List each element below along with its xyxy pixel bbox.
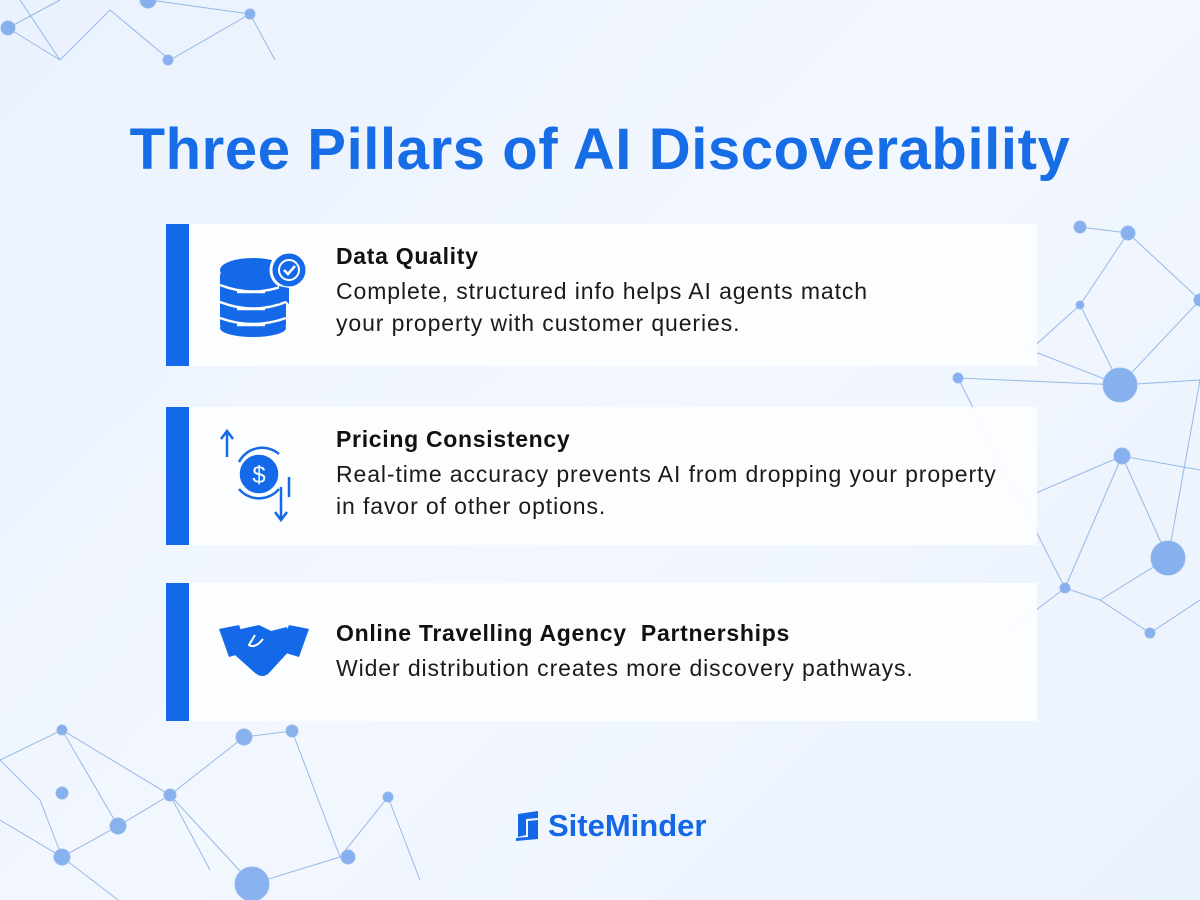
heading: OTA partnerships: Online Travelling Agency Partnerships — [336, 620, 790, 646]
text: data quality: your property with customer queries. — [336, 310, 740, 336]
text: data quality: Complete, structured info helps AI agents match — [336, 278, 868, 304]
text: pricing consistency — [336, 461, 997, 519]
logo: SiteMinder: SiteMinder — [548, 808, 706, 843]
icon: database with badge — [220, 254, 306, 337]
heading: data quality: Data Quality — [336, 243, 479, 269]
icon: price sync: $ — [252, 462, 266, 489]
text: pricing consistency: Real-time accuracy prevents AI from dropping your property — [336, 461, 997, 487]
icon: logo mark — [516, 811, 538, 841]
text: data quality — [336, 278, 868, 336]
heading: pricing consistency: Pricing Consistency — [336, 426, 570, 452]
title: Three Pillars of AI Discoverability — [130, 117, 1070, 182]
text: OTA partnerships: Wider distribution creates more discovery pathways. — [336, 655, 914, 681]
icon: price sync — [220, 429, 290, 522]
icon: handshake — [219, 625, 309, 676]
text: pricing consistency: in favor of other options. — [336, 493, 606, 519]
panel: pricing consistency — [166, 407, 1037, 545]
panel: data quality — [166, 224, 1037, 366]
panel: OTA partnerships — [166, 583, 1037, 721]
